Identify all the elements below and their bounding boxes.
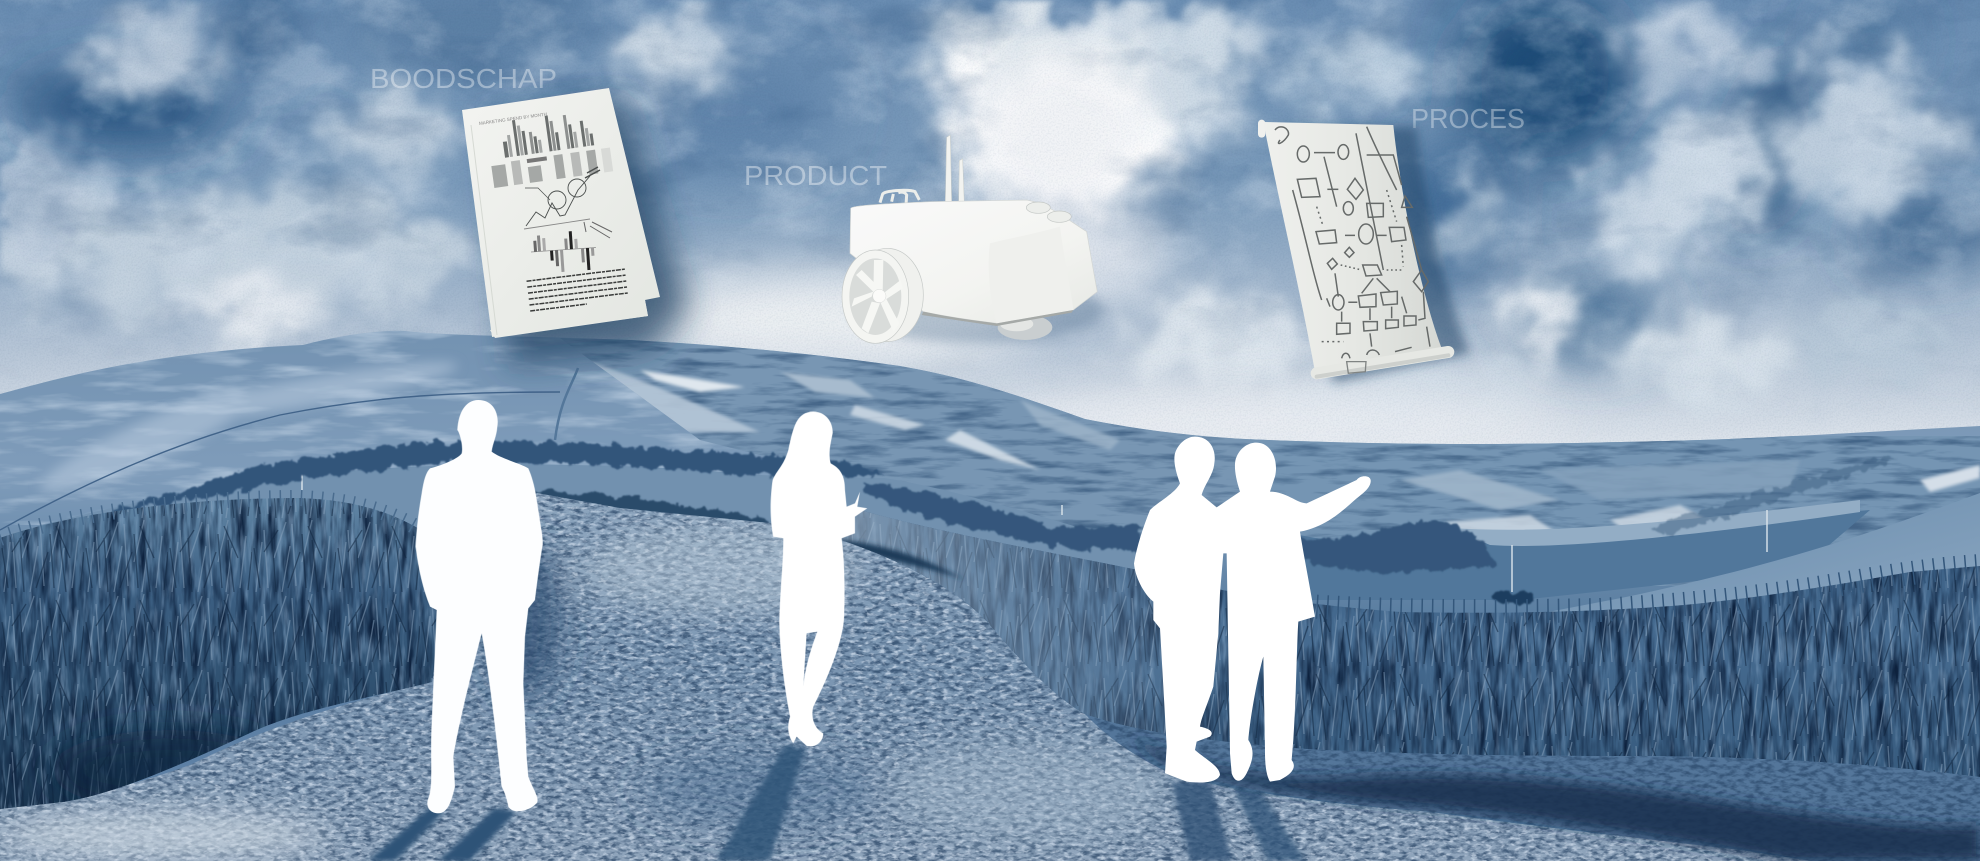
document: boodschap [462,88,690,365]
sky: soft cloud masses [0,0,1970,411]
scroll: proces flowchart [1262,122,1470,383]
robot: antennas [944,135,965,213]
robot: underside [922,310,1073,326]
hills: dark hedge along road [537,490,770,528]
grass field: right [830,500,1980,780]
sky: horizon glow [630,60,1570,446]
document: bar chart [479,106,594,161]
robot: handle [880,190,919,205]
document: paper sheets [462,88,660,338]
silhouette: two people pointing [1134,437,1371,783]
sky: dark blue patches [20,0,1980,360]
hills: right slope fields [560,338,1262,536]
hills: far valley [1250,436,1980,586]
scroll: paper sheet [1263,122,1442,372]
document: data table [491,147,613,188]
document: paragraph text [527,269,629,311]
robot: soft shadow [850,277,1103,343]
scroll: flowchart drawing [1275,127,1430,358]
robot: caps [1026,202,1071,222]
document: line chart [524,167,600,229]
silhouette: man standing [416,400,543,813]
scroll: top roll [1251,123,1273,134]
label: PRODUCT: PRODUCT [744,160,887,191]
hills: farm track [555,368,578,440]
hills: left foreground field [42,464,1135,569]
grass field: left blade tips [0,498,436,540]
grass field: right blade tips [1306,566,1980,611]
grass verge: lower right [1080,700,1980,861]
scroll: drop shadow [1280,127,1470,383]
robot: wheel spokes [852,260,903,333]
hills: poles [302,465,1767,592]
label: PROCES: PROCES [1411,103,1525,134]
sky: wisps [0,0,1980,356]
robot: body shell [850,200,1097,323]
road: cast shadows [368,745,1305,861]
sky background [0,0,1980,460]
hills: tree clumps [863,456,1895,605]
hills: valley floor and right slope [1300,493,1980,612]
road: soft light and shade patches [0,525,1170,860]
grass verge: dark shadow [1130,735,1980,861]
road: gravel texture [0,480,1980,861]
document: waterfall bars [530,230,597,274]
document: callout marks [584,222,612,238]
sky grain [0,0,1980,460]
hills: light field streaks [39,358,457,496]
document: bar chart: MARKETING SPEND BY MONTH [479,112,547,126]
grass field: left [0,490,450,820]
road [0,493,1808,861]
scroll: bottom roll [1317,352,1448,377]
robot: front wheel [842,248,923,343]
document: drop shadow [490,98,690,365]
robot: rear wheel [998,315,1052,340]
hills: tree line [114,442,884,514]
hills: field border [0,392,560,530]
landscape: rolling hills [0,325,1980,640]
label: BOODSCHAP: BOODSCHAP [370,63,557,94]
robot: side shading [989,227,1073,323]
silhouette: woman standing [771,412,867,747]
robot: product [842,135,1103,343]
